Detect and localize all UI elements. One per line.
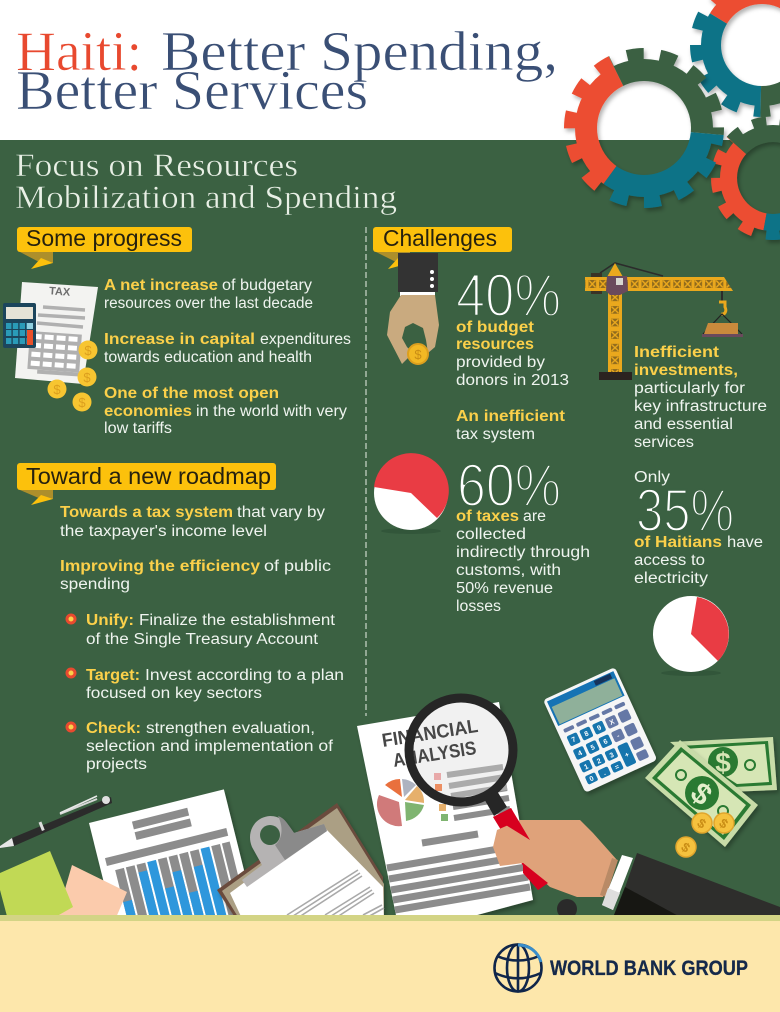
text block: roadmap xyxy=(60,504,331,593)
text block: inefficient investments: and essential xyxy=(634,416,733,433)
stat: 40 percent: provided by xyxy=(456,354,545,371)
text block: inefficient investments: services xyxy=(634,434,694,451)
green main panel xyxy=(0,140,780,916)
header band xyxy=(0,0,780,140)
icon: crane xyxy=(585,263,743,380)
list: target: focused on key sectors xyxy=(86,685,262,702)
list: unify: of the Single Treasury Account xyxy=(86,631,319,648)
stat: 60 percent: indirectly through xyxy=(456,544,590,561)
list: check: projects xyxy=(86,756,147,773)
icon: hand holding coin xyxy=(387,253,439,364)
text block: progress items: in the world with very xyxy=(196,403,347,420)
subtitle xyxy=(15,148,397,216)
text block: inefficient investments: particularly for xyxy=(634,380,745,397)
logo: world bank group xyxy=(494,944,748,992)
icon: gears xyxy=(564,0,780,244)
list: check: Check: xyxy=(86,720,141,737)
icon: calculator: X xyxy=(609,718,616,727)
icon: sticky notes xyxy=(0,851,127,920)
text block: inefficient tax system: An inefficient xyxy=(456,408,565,425)
icon: tax form with calculator and coins: $ xyxy=(83,370,91,385)
text block: progress items xyxy=(104,277,351,437)
icon: calculator: 9 xyxy=(596,725,603,733)
badge: toward a new roadmap: Toward a new roadmap xyxy=(26,463,271,489)
stat: 60 percent: losses xyxy=(456,598,501,615)
icon: financial analysis document xyxy=(357,702,533,925)
icon: chart document xyxy=(89,789,258,961)
text block: progress items: A net increase xyxy=(104,277,218,294)
pie chart: 35 percent xyxy=(653,596,729,676)
icon: tax form with calculator and coins: TAX xyxy=(49,285,71,299)
stat: 40 percent: of budget xyxy=(456,319,534,336)
badge: challenges xyxy=(373,225,512,269)
title: Haiti: xyxy=(16,21,142,83)
icon: pen xyxy=(0,796,112,848)
list: unify: Unify: xyxy=(86,612,134,629)
bar chart on document xyxy=(115,842,251,957)
icon: magnifying glass over document: FINANCIAL xyxy=(380,716,480,752)
stat: 60 percent: 60% xyxy=(457,452,561,519)
subtitle: Focus on Resources xyxy=(15,148,298,184)
icon: calculator: + xyxy=(624,751,631,760)
list: target: Invest according to a plan xyxy=(145,667,344,684)
icon: calculator: 0 xyxy=(589,775,595,783)
icon: tax form with calculator and coins xyxy=(3,282,98,412)
stat: 35 percent: of Haitians xyxy=(634,534,722,551)
icon: calculator: 1 xyxy=(583,763,590,771)
icon: banknotes and coins: $ xyxy=(684,776,718,812)
title: Better Services xyxy=(16,60,368,122)
text block: progress items: towards education and health xyxy=(104,349,312,366)
stat: 40 percent: donors in 2013 xyxy=(456,372,569,389)
badge: challenges: Challenges xyxy=(383,225,497,251)
column divider xyxy=(365,227,367,716)
stat: 60 percent xyxy=(456,452,590,615)
icon: calculator: 2 xyxy=(596,758,603,766)
icon: calculator: 7 xyxy=(571,736,577,744)
footer band xyxy=(0,915,780,1012)
stat: 60 percent: 50% revenue xyxy=(456,580,553,597)
text block: inefficient investments xyxy=(634,344,767,451)
text block: progress items: One of the most open xyxy=(104,385,279,402)
icon: calculator: 8 xyxy=(584,730,590,738)
icon: banknotes and coins xyxy=(645,737,777,857)
stat: 60 percent: customs, with xyxy=(456,562,561,579)
icon: hand holding magnifier xyxy=(493,808,780,925)
title: Better Spending, xyxy=(161,21,558,83)
text block: progress items: Increase in capital xyxy=(104,331,255,348)
stat: 35 percent: access to xyxy=(634,552,705,569)
icon: tax form with calculator and coins: $ xyxy=(84,343,92,358)
pie chart: 60 percent xyxy=(374,453,449,534)
list: check: strengthen evaluation, xyxy=(146,720,315,737)
list: unify: Finalize the establishment xyxy=(139,612,336,629)
icon: calculator: . xyxy=(602,770,607,777)
icon: calculator xyxy=(543,667,657,793)
icon: calculator: 6 xyxy=(603,738,609,746)
subtitle: Mobilization and Spending xyxy=(15,180,397,216)
list: check: selection and implementation of xyxy=(86,738,334,755)
stat: 40 percent xyxy=(456,262,569,389)
list: target: Target: xyxy=(86,667,140,684)
text block: progress items: economies xyxy=(104,403,192,420)
stat: 35 percent: have xyxy=(727,534,763,551)
title xyxy=(16,21,558,122)
text block: inefficient investments: investments, xyxy=(634,362,738,379)
icon: calculator: 4 xyxy=(577,750,584,758)
list: unify xyxy=(67,612,336,648)
icon: tax form with calculator and coins: $ xyxy=(78,395,86,410)
pie chart on document xyxy=(377,779,424,826)
icon: banknotes and coins: $ xyxy=(716,815,732,832)
text block: inefficient investments: Inefficient xyxy=(634,344,719,361)
stat: 35 percent xyxy=(634,469,763,587)
text block: roadmap: the taxpayer's income level xyxy=(60,523,267,540)
text block: inefficient tax system xyxy=(456,408,565,443)
icon: calculator: 3 xyxy=(609,752,615,760)
text block: progress items: resources over the last decade xyxy=(104,295,313,312)
list: check xyxy=(67,720,334,773)
icon: hand holding coin: $ xyxy=(414,347,422,362)
badge: toward a new roadmap xyxy=(17,463,276,505)
stat: 40 percent: resources xyxy=(456,336,534,353)
stat: 60 percent: collected xyxy=(456,526,526,543)
list: target xyxy=(67,667,344,702)
text block: progress items: low tariffs xyxy=(104,420,172,437)
stat: 40 percent: 40% xyxy=(456,262,561,329)
text block: roadmap: of public xyxy=(264,558,331,575)
icon: banknotes and coins: $ xyxy=(715,747,731,778)
text block: inefficient tax system: tax system xyxy=(456,426,535,443)
icon: magnifying glass over document xyxy=(380,698,548,890)
stat: 35 percent: 35% xyxy=(636,477,734,544)
icon: clipboard xyxy=(217,803,384,925)
badge: some progress: Some progress xyxy=(26,225,182,251)
icon: calculator: 5 xyxy=(590,744,596,752)
stat: 35 percent: Only xyxy=(634,469,670,486)
stat: 60 percent: are xyxy=(523,508,546,525)
icon: banknotes and coins: $ xyxy=(678,839,694,856)
logo: world bank group: WORLD BANK GROUP xyxy=(550,957,748,980)
text block: roadmap: Towards a tax system xyxy=(60,504,233,521)
text block: roadmap: Improving the efficiency xyxy=(60,558,260,575)
text block: roadmap: spending xyxy=(60,576,130,593)
text block: progress items: of budgetary xyxy=(222,277,312,294)
stat: 60 percent: of taxes xyxy=(456,508,519,525)
icon: calculator: = xyxy=(614,764,621,772)
icon: tax form with calculator and coins: $ xyxy=(53,382,61,397)
icon: banknotes and coins: $ xyxy=(694,815,710,832)
badge: some progress xyxy=(17,225,192,269)
icon: calculator: - xyxy=(616,732,622,740)
stat: 35 percent: electricity xyxy=(634,570,708,587)
text block: progress items: expenditures xyxy=(260,331,351,348)
text block: inefficient investments: key infrastructure xyxy=(634,398,767,415)
text block: roadmap: that vary by xyxy=(237,504,325,521)
icon: magnifying glass over document: ANALYSIS xyxy=(391,738,478,772)
